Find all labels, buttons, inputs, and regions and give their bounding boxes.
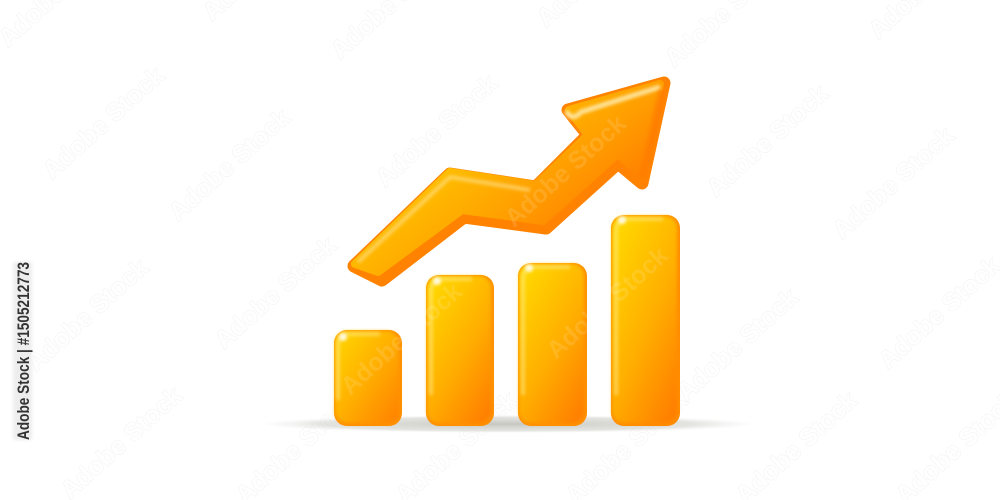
- arrow face: [355, 84, 660, 272]
- watermark pattern: Adobe Stock: [370, 69, 503, 192]
- watermark pattern: Adobe Stock: [671, 283, 804, 406]
- bar chart: [334, 215, 680, 426]
- watermark pattern: Adobe Stock: [21, 253, 154, 376]
- watermark over arrow: Adobe Stock: [499, 109, 632, 232]
- ground shadow: [260, 415, 756, 433]
- bar 4: [611, 215, 680, 426]
- vertical image ID text: Adobe Stock | #1505212773: [14, 262, 33, 440]
- watermark pattern: Adobe Stock: [209, 231, 342, 354]
- bar 1: [334, 330, 402, 426]
- watermark pattern: Adobe Stock: [827, 121, 960, 244]
- arrow right shade: [642, 90, 662, 178]
- bar 2: [426, 275, 494, 426]
- faint watermark over bars: Adobe Stock: [541, 241, 674, 364]
- arrow base (dark edge): [354, 83, 664, 280]
- watermark pattern: Adobe Stock: [37, 61, 170, 184]
- faint watermark over bars: Adobe Stock: [335, 277, 468, 400]
- bar 3: [518, 263, 587, 426]
- faint watermark over bars: [335, 241, 674, 400]
- watermark pattern: Adobe Stock: [701, 79, 834, 202]
- arrow highlight: head: [566, 87, 660, 117]
- watermark pattern: Adobe Stock: [163, 103, 296, 226]
- arrow highlight: shaft: [358, 177, 530, 262]
- arrow: [354, 83, 664, 280]
